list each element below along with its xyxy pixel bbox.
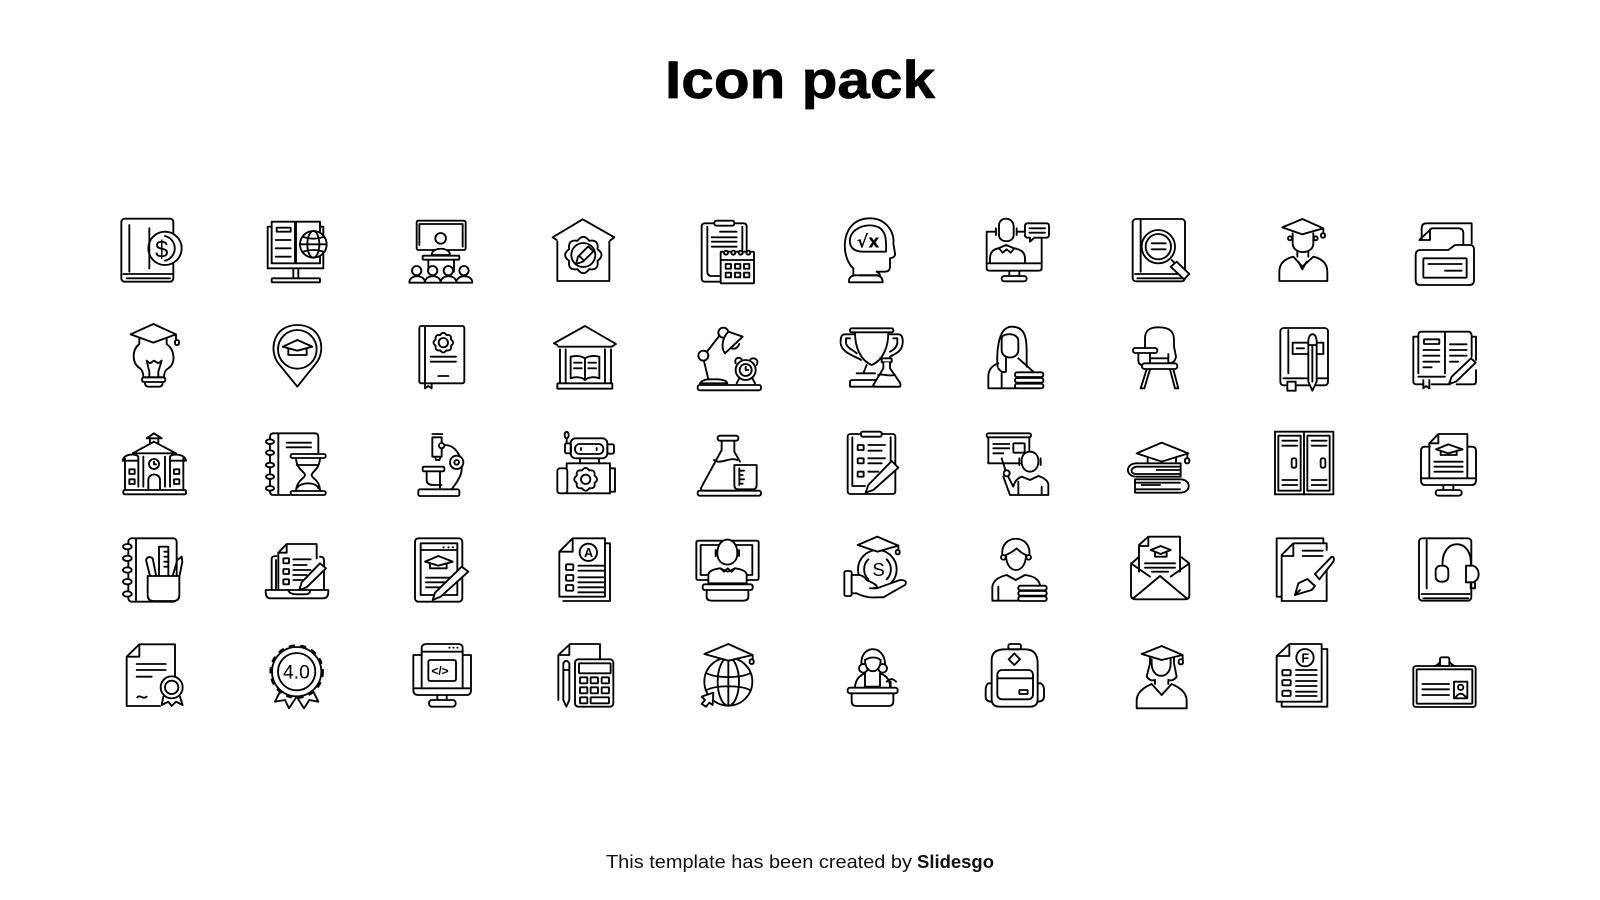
icon: laptop with checklist <box>266 544 328 598</box>
icon: tablet with pencil <box>415 538 468 602</box>
icon: audio book with headphones <box>1419 538 1479 601</box>
icon: head with math root: √x <box>857 232 879 252</box>
icon: hand holding coin with cap: S <box>872 559 885 580</box>
icon: 4.0 rating badge <box>270 645 323 708</box>
icon: hand holding coin with cap <box>844 537 906 597</box>
icon: globe with cap and cursor <box>702 644 754 707</box>
icon: head with math root <box>845 218 895 282</box>
icon: notebook with pen cup <box>123 538 182 602</box>
icon: teacher at board <box>987 433 1048 495</box>
icon group: rows 4-5, columns 8-10 <box>1131 537 1479 708</box>
icon: light bulb with graduation cap <box>131 324 179 387</box>
icon: lecture audience <box>409 221 472 283</box>
footer credit: This template has been created by <box>606 852 912 872</box>
icon: monitor with code <box>413 644 471 707</box>
icon: location pin with cap <box>273 325 321 387</box>
icon: books with graduation cap <box>1128 443 1189 493</box>
icon: library building with book <box>554 326 616 389</box>
icon: flask and beaker <box>698 436 761 496</box>
icon: school chair desk <box>1133 327 1178 388</box>
icon: trophy and flask <box>841 328 903 387</box>
footer credit: Slidesgo <box>917 852 994 872</box>
icon: woman at podium <box>848 649 898 706</box>
icon: calculator with paper and pencil <box>558 644 613 707</box>
icon: book with gear <box>419 326 464 388</box>
icon group: rows 4-5, columns 5-7 <box>696 537 1047 707</box>
icon: school building <box>123 433 186 494</box>
icon: monitor with code: </> <box>431 664 449 678</box>
icon: online teacher at desk <box>696 540 759 601</box>
icon: clipboard with calendar <box>702 221 754 283</box>
icon: graded paper F <box>1277 644 1327 707</box>
icon: folder with file <box>1416 223 1474 285</box>
icon: desk lamp and alarm clock <box>698 328 761 390</box>
icon: certificate with ribbon <box>127 644 183 706</box>
icon: book with magnifier <box>1133 219 1189 281</box>
icon: book with pencil <box>1280 328 1328 391</box>
icon: open book with pencil <box>1413 332 1476 388</box>
icon group: rows 1-3, columns 1-4 <box>121 219 616 496</box>
icon: school lockers <box>1275 432 1333 494</box>
icon: checklist clipboard with pencil <box>848 432 898 494</box>
icon: online tutor on monitor <box>987 219 1049 281</box>
icon: backpack <box>986 644 1044 707</box>
icon: notebook with hourglass <box>266 433 326 495</box>
icon: book with dollar coin <box>121 219 182 282</box>
icon group: rows 4-5, columns 1-4 <box>123 538 613 708</box>
icon: online book and globe <box>268 222 327 282</box>
icon: house with gear and pencil <box>553 219 614 281</box>
icon: male student with books <box>992 539 1047 601</box>
icon: graded paper F: F <box>1301 651 1309 665</box>
icon: graduate man <box>1279 219 1327 281</box>
icon group: rows 1-3, columns 8-10 <box>1128 219 1476 496</box>
title: Icon pack <box>665 51 936 110</box>
icon: 4.0 rating badge: 4.0 <box>283 663 310 684</box>
icon group: rows 1-3, columns 5-7 <box>698 218 1049 496</box>
icon: monitor with diploma document <box>1421 434 1476 496</box>
icon: ID badge <box>1413 657 1476 707</box>
icon: robot with gear <box>557 432 615 493</box>
icon: microscope <box>418 434 463 496</box>
icon: woman with books <box>988 327 1043 388</box>
icon: papers with fountain pen <box>1277 538 1334 601</box>
icon: envelope with diploma <box>1131 537 1189 599</box>
icon: graduate woman <box>1137 646 1187 708</box>
icon: book with dollar coin: $ <box>155 236 168 263</box>
icon: graded paper A <box>559 538 610 601</box>
icon: graded paper A: A <box>584 546 593 560</box>
